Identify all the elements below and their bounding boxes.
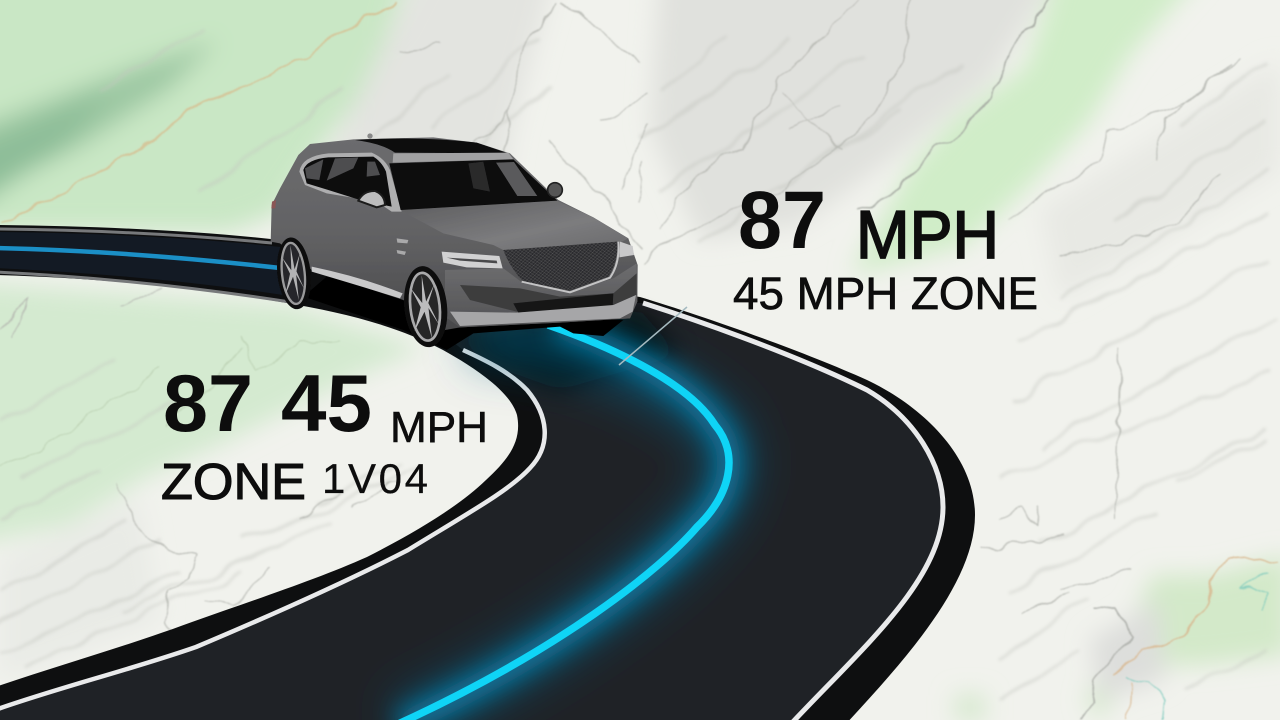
left headlight slit (447, 258, 497, 263)
car (271, 133, 638, 350)
MPH left: MPH (390, 403, 488, 452)
roof antenna (367, 133, 373, 139)
windshield reflection (496, 162, 537, 196)
dark zone under car front (450, 310, 680, 390)
front wheel (400, 264, 451, 349)
interior seats hint (468, 162, 490, 192)
MPH: MPH (856, 197, 999, 273)
rear taillight (271, 200, 276, 208)
45 left: 45 (281, 359, 372, 449)
speed label: lower left (161, 359, 488, 510)
road lane surface (0, 300, 943, 720)
side window trim (299, 153, 402, 212)
45 MPH ZONE: 45 MPH ZONE (733, 268, 1038, 319)
road edge line outer (643, 303, 943, 720)
lower intake (460, 273, 637, 312)
right mirror (548, 183, 562, 197)
speed label: upper right (733, 175, 1038, 319)
rear wheel (274, 236, 314, 311)
1V04: 1V04 (322, 455, 428, 502)
car body (271, 137, 638, 330)
glow under lane line (400, 325, 729, 720)
left mirror (358, 191, 385, 207)
wide blue glow (400, 338, 729, 720)
car shadow (303, 277, 623, 350)
road edge line inner (0, 350, 545, 710)
87: 87 (738, 175, 826, 266)
ZONE: ZONE (161, 453, 306, 510)
road surface (0, 225, 975, 720)
top-left road grey lines (0, 229, 290, 302)
grille (503, 242, 617, 291)
side window highlights (305, 157, 380, 181)
glowing lane line (396, 325, 729, 720)
side windows (303, 157, 392, 207)
chin trim (450, 295, 636, 326)
pointer line (619, 307, 687, 365)
road (0, 225, 975, 720)
body side crease (312, 267, 403, 298)
hood (400, 201, 628, 250)
left headlight (442, 252, 503, 268)
roof panel (355, 138, 508, 153)
grille chrome (522, 242, 619, 292)
blue-tinted road section behind car (0, 232, 290, 296)
intake inner (513, 293, 613, 313)
right headlight (619, 242, 634, 257)
fender vents (397, 238, 408, 255)
87 left: 87 (163, 359, 253, 449)
blue lane line left (0, 248, 280, 268)
front fascia (445, 263, 637, 327)
roof bar (393, 153, 513, 163)
windshield (389, 159, 557, 210)
